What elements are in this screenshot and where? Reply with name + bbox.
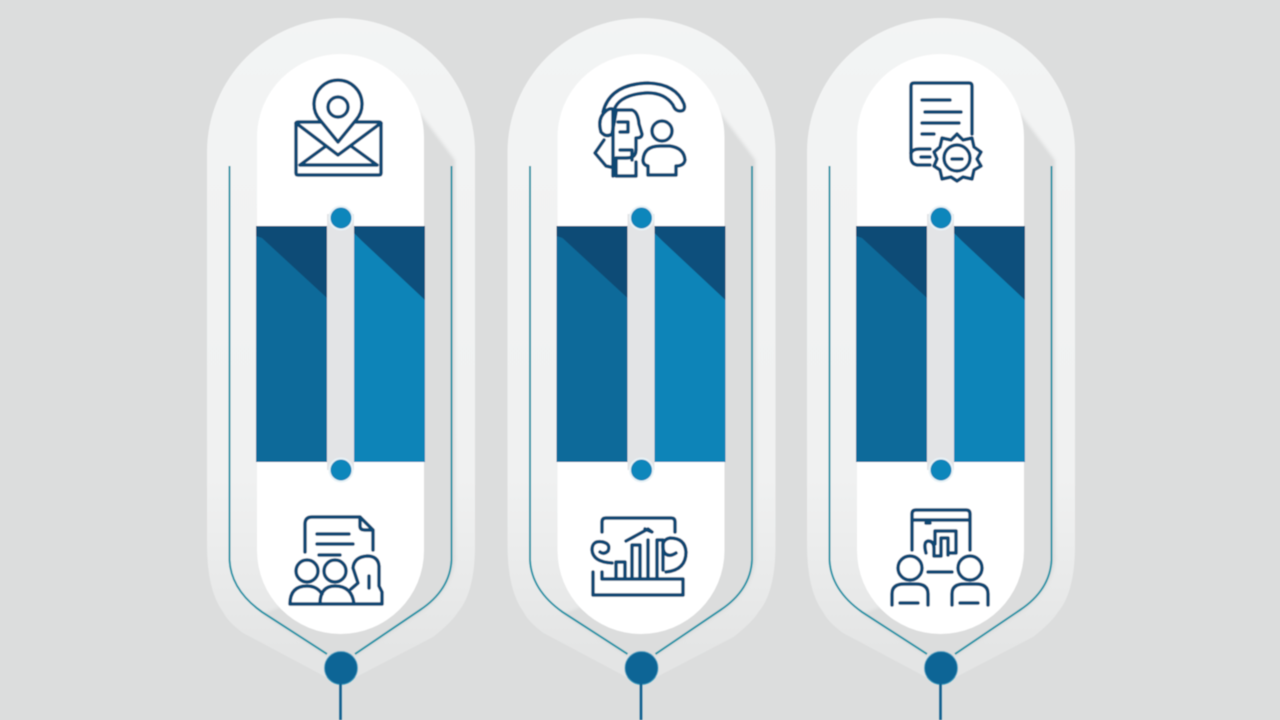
inner white pill xyxy=(857,54,1024,634)
top dot xyxy=(630,206,653,230)
teal outline left and right xyxy=(830,166,1052,654)
blue panel left xyxy=(556,226,628,462)
panel: card 1 xyxy=(207,18,475,720)
inner white pill xyxy=(257,54,424,634)
icon: document with gear xyxy=(911,83,981,181)
blue panel right xyxy=(354,226,425,462)
connector line xyxy=(939,684,942,720)
outer capsule xyxy=(207,18,475,681)
blue panel left xyxy=(856,226,927,462)
teal outline left and right xyxy=(530,166,752,654)
blue panel left xyxy=(256,226,327,462)
icon: chart presentation board xyxy=(592,518,686,595)
center bar xyxy=(628,214,654,470)
connector node xyxy=(924,652,958,684)
lower dot xyxy=(330,458,352,482)
icon: team with document xyxy=(290,517,382,604)
panel: card 2 xyxy=(508,18,776,720)
icon: two people with screen xyxy=(892,510,988,605)
connector line xyxy=(339,684,342,720)
top dot xyxy=(930,206,952,230)
inner white pill xyxy=(558,54,724,634)
blue panel right xyxy=(654,226,726,462)
icon: envelope with location pin xyxy=(296,80,381,175)
connector line xyxy=(640,684,642,720)
center bar xyxy=(327,214,354,470)
lower dot xyxy=(630,458,653,482)
panel: card 3 xyxy=(807,18,1075,720)
outer capsule xyxy=(508,18,776,681)
icon: headset agent with customer xyxy=(595,83,685,176)
blue panel right xyxy=(954,226,1025,462)
connector node xyxy=(625,652,658,684)
top dot xyxy=(330,206,352,230)
lower dot xyxy=(930,458,952,482)
center bar xyxy=(927,214,954,470)
connector node xyxy=(324,652,358,684)
teal outline left and right xyxy=(230,166,452,654)
outer capsule xyxy=(807,18,1075,681)
